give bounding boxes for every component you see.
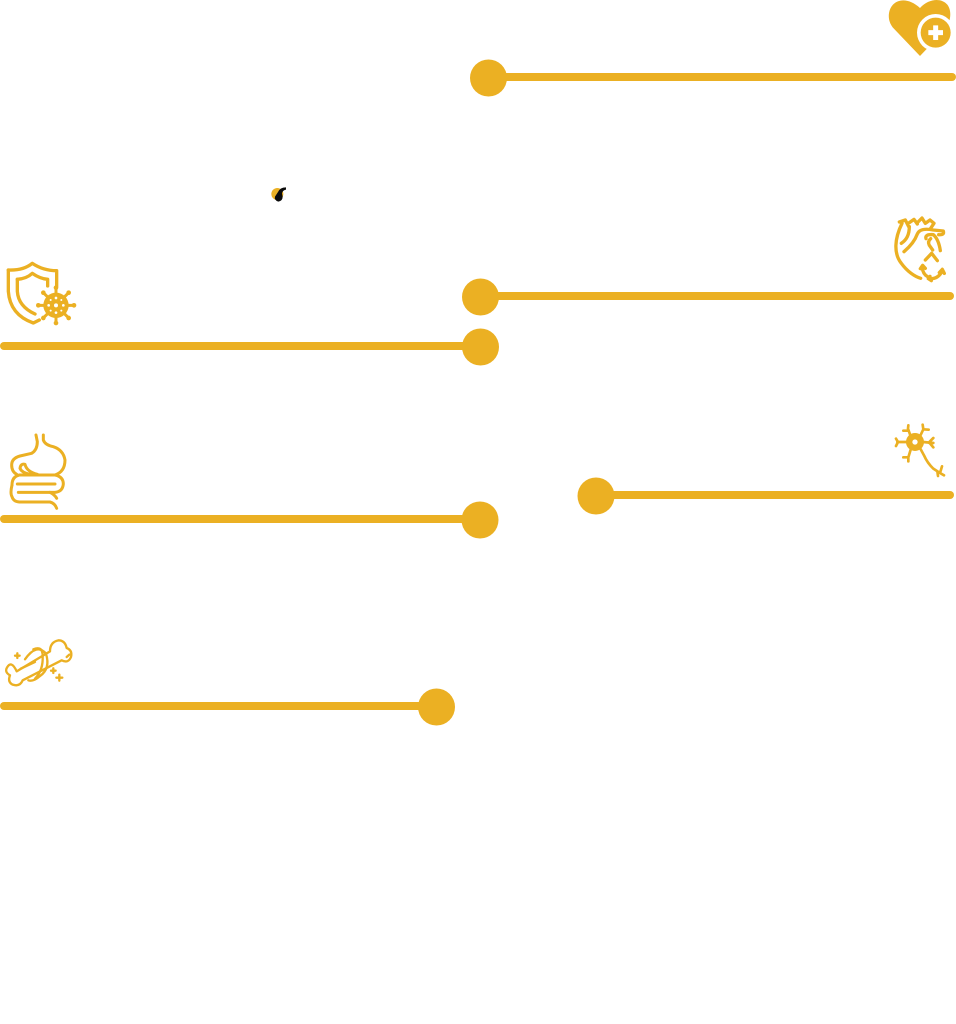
timeline bar: heart health [470, 60, 956, 96]
timeline bar: bone health [0, 688, 455, 726]
icon: heart with plus badge [889, 0, 954, 56]
icon: shield with virus [8, 263, 76, 325]
timeline bar: cardiovascular [462, 278, 954, 316]
timeline bar: nervous system [578, 478, 954, 514]
timeline bar: immune system [0, 328, 499, 366]
icon: bone with sparkles [6, 640, 71, 685]
timeline bar: digestive system [0, 502, 498, 538]
icon: stomach and intestine [11, 435, 65, 508]
logo mark [271, 187, 286, 202]
icon: neuron [896, 425, 944, 476]
icon: anatomical heart with recycling drop [896, 218, 944, 281]
